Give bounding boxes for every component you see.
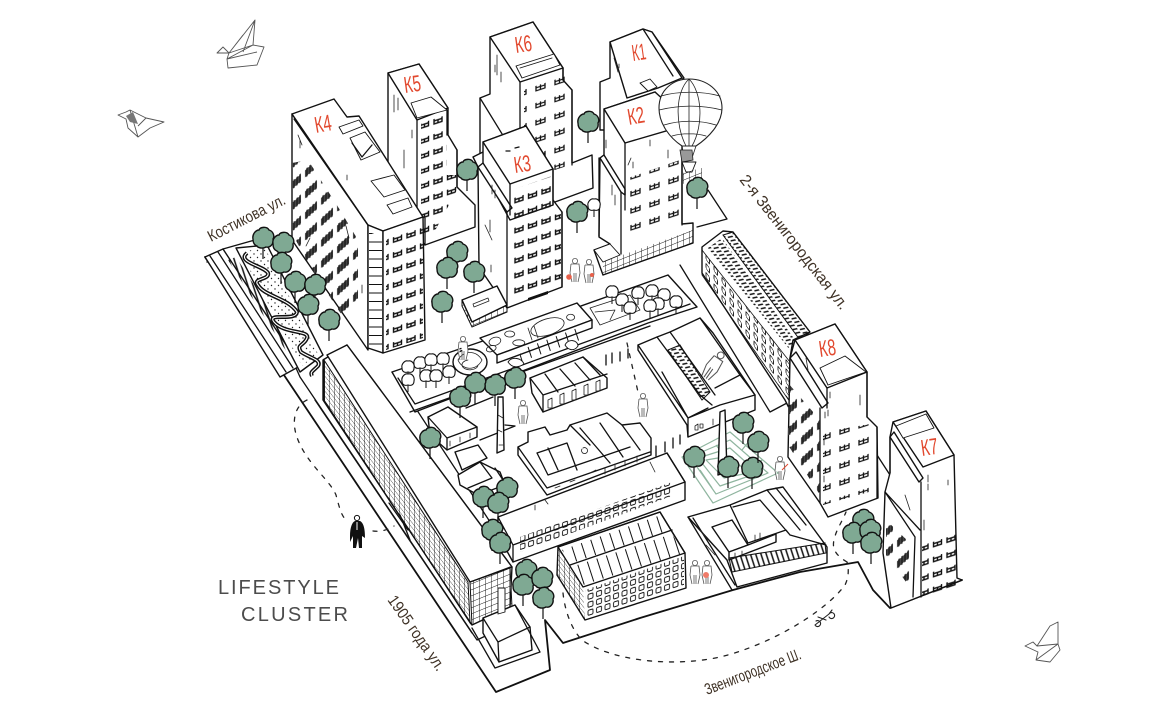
trees: [253, 111, 882, 619]
figures: [458, 258, 788, 584]
grid-facade long building: [702, 231, 810, 410]
long office building with glazed facade: [323, 345, 512, 625]
building K5: [388, 64, 475, 245]
annex block: [472, 588, 540, 668]
title: Lifestyle Cluster: CLUSTER: [241, 604, 348, 626]
label K7: К7: [919, 433, 940, 461]
building K3: [473, 126, 562, 308]
building K4: [292, 99, 425, 353]
origami bird top: [217, 20, 264, 68]
bicycle: [815, 610, 835, 627]
building K8: [788, 324, 878, 517]
label K8: К8: [817, 334, 838, 362]
site ground outline: [205, 190, 962, 692]
label K4: К4: [312, 109, 334, 138]
courtyard small houses: [428, 397, 515, 495]
old brick long building: [498, 453, 685, 562]
building K2: [594, 92, 693, 275]
rooftop podium with park and playgrounds: [392, 275, 697, 412]
hangar with arched roof: [530, 357, 607, 412]
street label: Kostikova: Костикова ул.: [205, 192, 289, 246]
dashed walking routes: [294, 343, 848, 662]
building complex with ribbed facade: [688, 487, 827, 590]
maze garden: [682, 410, 778, 503]
building K1: [600, 29, 684, 130]
origami bird left: [118, 110, 164, 137]
workshops with sawtooth roof: [638, 318, 755, 437]
park strip with stream: [205, 245, 323, 377]
origami bird bottom right: [1025, 622, 1060, 662]
street label: Zvenigorodskoe highway: Звенигородское Ш.: [702, 646, 804, 699]
title: Lifestyle Cluster: LIFESTYLE: [218, 577, 339, 599]
man in black suit: [350, 515, 365, 548]
central factory building: [518, 413, 651, 495]
label K6: К6: [513, 30, 534, 58]
label K2: К2: [625, 101, 647, 130]
big grid-windowed hall: [557, 512, 686, 620]
hot air balloon: [659, 79, 722, 184]
plaza bollards: [606, 349, 680, 456]
label K3: К3: [512, 150, 533, 178]
building K6: [480, 22, 593, 215]
label K5: К5: [402, 70, 423, 98]
street label: 2nd Zvenigorodskaya: 2-я Звенигородская ул.: [736, 172, 851, 313]
label K1: К1: [630, 38, 648, 66]
title: Lifestyle Cluster: [218, 577, 348, 626]
small pavilion: [462, 286, 507, 327]
street label: 1905 goda: 1905 года ул.: [384, 593, 448, 674]
building K7: [883, 411, 962, 608]
